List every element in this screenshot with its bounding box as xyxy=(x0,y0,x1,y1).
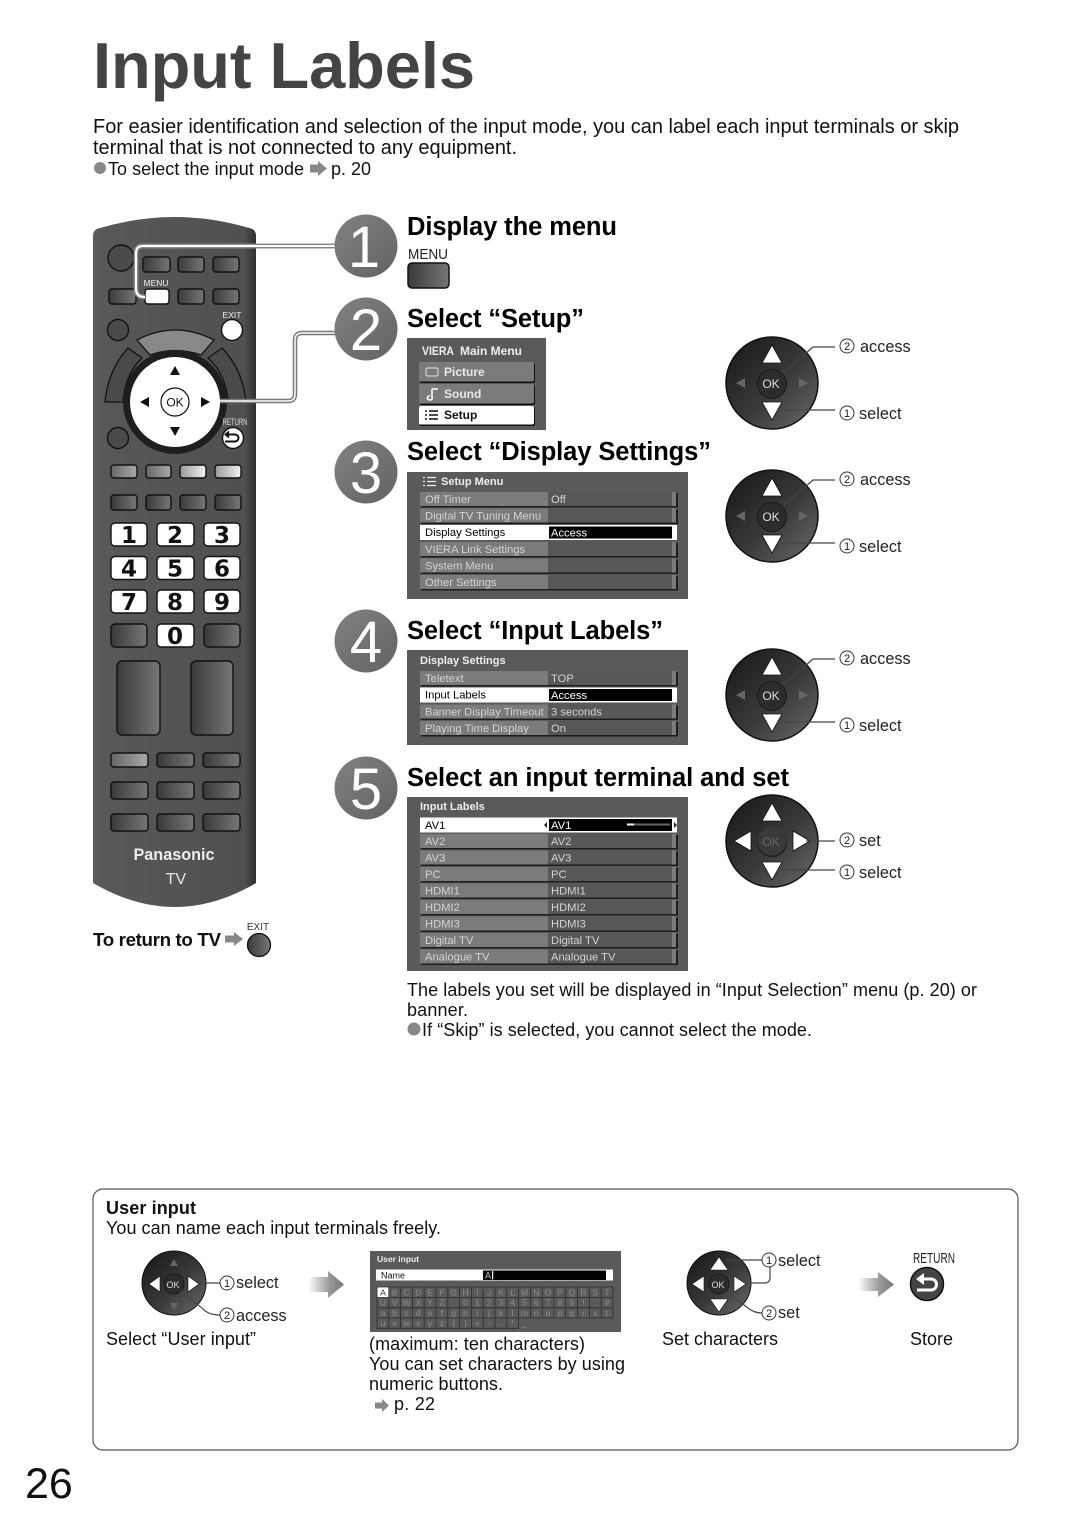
step 3 heading: Select “Display Settings” xyxy=(407,438,711,466)
panel: setup menu: Setup Menu xyxy=(441,476,503,488)
step 2 badge: 2 xyxy=(350,298,382,363)
return button xyxy=(108,417,248,448)
panel: display settings: Input Labels xyxy=(425,690,486,702)
labels: select xyxy=(859,864,902,882)
arrow xyxy=(308,1271,344,1298)
panel: main menu: Picture xyxy=(444,365,485,379)
dpad: step 3 xyxy=(726,470,911,562)
ok ring: OK xyxy=(166,396,184,410)
panel: user input keyboard: abcdefghijklmnopqrst xyxy=(381,1308,609,1318)
panel: setup menu: System Menu xyxy=(425,560,493,572)
panel: display settings xyxy=(407,650,688,745)
panel: user input keyboard: uvwxyz()+-.*_ xyxy=(381,1318,527,1328)
step 5 heading: Select an input terminal and set xyxy=(407,764,790,792)
dpad: set characters xyxy=(687,1251,821,1322)
labels xyxy=(840,338,911,423)
labels: access xyxy=(860,650,911,668)
dpad: step 5: OK xyxy=(762,835,780,849)
panel: input labels: AV2 xyxy=(551,836,571,848)
ok ring xyxy=(123,350,227,454)
intro text: For easier identification and selection of the input mode, you can label each input terminals or skip xyxy=(93,116,959,138)
panel: display settings: 3 seconds xyxy=(551,706,602,718)
dpad: set characters: set xyxy=(778,1304,800,1322)
panel: input labels: PC xyxy=(425,869,441,881)
labels: 1 xyxy=(844,541,850,553)
panel: input labels: HDMI2 xyxy=(425,902,460,914)
return to TV: EXIT xyxy=(247,922,269,933)
number keys: 0 xyxy=(167,624,183,650)
caption: select user input: Select “User input” xyxy=(106,1329,256,1349)
brand: Panasonic xyxy=(134,846,214,864)
panel: input labels: AV3 xyxy=(425,852,445,864)
dpad: set characters: select xyxy=(778,1252,821,1270)
labels: 2 xyxy=(844,653,850,665)
labels xyxy=(840,650,911,735)
panel: input labels: HDMI1 xyxy=(425,886,460,898)
input mode note: To select the input mode xyxy=(108,159,304,179)
panel: display settings: TOP xyxy=(551,673,574,685)
panel: main menu: Setup xyxy=(444,408,477,422)
panel: main menu: Main Menu xyxy=(460,344,522,358)
labels: select xyxy=(859,717,902,735)
caption: maximum characters xyxy=(369,1334,625,1414)
caption: set characters: Set characters xyxy=(662,1329,778,1349)
panel: main menu: VIERA xyxy=(422,346,454,358)
remote control xyxy=(93,217,256,907)
panel: user input keyboard: User input xyxy=(377,1254,419,1264)
labels xyxy=(840,471,911,556)
dpad: select user input: 2 xyxy=(224,1310,230,1322)
panel: setup menu xyxy=(407,472,688,599)
dpad: step 2 xyxy=(726,337,911,429)
return button: RETURN xyxy=(222,417,248,427)
page number: 26 xyxy=(25,1460,73,1508)
panel: input labels: Analogue TV xyxy=(425,952,490,964)
step 4 badge: 4 xyxy=(350,610,382,675)
connector: step 2 to ok ring xyxy=(220,333,340,401)
labels: select xyxy=(859,538,902,556)
step 2 heading: Select “Setup” xyxy=(407,305,584,333)
panel: display settings: Playing Time Display xyxy=(425,723,529,735)
panel: input labels: AV2 xyxy=(425,836,445,848)
number keys: 1 xyxy=(121,523,137,549)
panel: input labels: HDMI3 xyxy=(425,918,460,930)
labels: 1 xyxy=(844,720,850,732)
dpad: select user input xyxy=(142,1251,287,1325)
panel: input labels: AV3 xyxy=(551,852,571,864)
dpad: select user input: OK xyxy=(166,1280,180,1290)
panel: setup menu: Access xyxy=(551,528,587,540)
dpad: set characters: OK xyxy=(711,1280,725,1290)
panel: display settings: Banner Display Timeout xyxy=(425,706,545,718)
panel: user input keyboard xyxy=(370,1251,621,1332)
labels: 2 xyxy=(844,835,850,847)
step 1 badge: 1 xyxy=(348,215,380,280)
caption: maximum characters: You can set characters by using xyxy=(369,1354,625,1374)
number keys: 3 xyxy=(214,523,230,549)
intro text xyxy=(93,116,959,159)
labels: set xyxy=(859,832,881,850)
user input description: You can name each input terminals freely. xyxy=(106,1218,441,1238)
panel: setup menu: Off xyxy=(551,494,567,506)
caption: store: Store xyxy=(910,1329,953,1349)
panel: input labels xyxy=(407,797,688,971)
dpad: set characters: 1 xyxy=(766,1255,772,1267)
panel: display settings: Teletext xyxy=(425,673,464,685)
return to TV: To return to TV xyxy=(93,929,221,950)
labels: access xyxy=(860,338,911,356)
dpad: step 4: OK xyxy=(762,689,780,703)
caption: maximum characters: p. 22 xyxy=(394,1394,435,1414)
power and top buttons: EXIT xyxy=(223,310,241,320)
number keys xyxy=(111,523,240,650)
step 4 badge xyxy=(334,610,398,675)
dpad: step 4 xyxy=(726,649,911,741)
panel: display settings: Access xyxy=(551,690,587,702)
panel: input labels: PC xyxy=(551,869,567,881)
return button: RETURN xyxy=(913,1250,955,1267)
number keys: 5 xyxy=(167,556,183,582)
panel: user input keyboard: A BCDEFGHIJKLMNOPQRST xyxy=(380,1288,610,1298)
note below step 5: The labels you set will be displayed in “Input Selection” menu (p. 20) or xyxy=(407,980,977,1000)
panel: input labels: HDMI2 xyxy=(551,902,586,914)
labels: 1 xyxy=(844,867,850,879)
panel: main menu xyxy=(407,338,546,430)
panel: input labels: AV1 xyxy=(425,820,445,832)
panel: setup menu: Other Settings xyxy=(425,577,497,589)
panel: user input keyboard: A xyxy=(485,1270,491,1280)
caption: maximum characters: (maximum: ten characters) xyxy=(369,1334,585,1354)
dpad: select user input: access xyxy=(236,1307,287,1325)
labels: 1 xyxy=(844,408,850,420)
note below step 5: banner. xyxy=(407,1000,468,1020)
connector: step 1 to menu button xyxy=(136,246,340,297)
number keys: 4 xyxy=(121,556,137,582)
panel: setup menu: Digital TV Tuning Menu xyxy=(425,510,541,522)
labels xyxy=(840,832,902,882)
arrow xyxy=(858,1272,894,1297)
step 3 badge: 3 xyxy=(350,441,382,506)
panel: user input xyxy=(93,1189,1018,1450)
dpad: step 2: OK xyxy=(762,377,780,391)
step 1 badge xyxy=(334,214,398,280)
panel: input labels: Analogue TV xyxy=(551,952,616,964)
lower buttons xyxy=(111,753,240,831)
labels: access xyxy=(860,471,911,489)
dpad: select user input: select xyxy=(236,1274,279,1292)
labels: 2 xyxy=(844,341,850,353)
number keys: 7 xyxy=(121,590,137,616)
brand: TV xyxy=(166,871,187,888)
number keys: 6 xyxy=(214,556,230,582)
labels: 2 xyxy=(844,474,850,486)
volume and channel rockers xyxy=(117,661,233,735)
dpad: step 3: OK xyxy=(762,510,780,524)
power and top buttons xyxy=(108,245,242,340)
panel: input labels: HDMI1 xyxy=(551,886,586,898)
menu button xyxy=(408,246,449,288)
colour buttons xyxy=(111,465,241,510)
panel: user input keyboard: UVWXYZ0123456789!:# xyxy=(380,1298,610,1308)
step 4 heading: Select “Input Labels” xyxy=(407,617,663,645)
panel: user input keyboard: Name xyxy=(381,1270,405,1280)
menu button: MENU xyxy=(408,246,448,263)
number keys: 9 xyxy=(214,590,230,616)
number keys: 2 xyxy=(167,523,183,549)
brand xyxy=(134,846,214,888)
note below step 5: If “Skip” is selected, you cannot select the mode. xyxy=(422,1020,812,1040)
panel: input labels: Input Labels xyxy=(420,801,485,813)
panel: main menu: Sound xyxy=(444,387,481,401)
step 5 badge xyxy=(334,756,398,822)
step 5 badge: 5 xyxy=(350,757,382,822)
labels: select xyxy=(859,405,902,423)
panel: setup menu: VIERA Link Settings xyxy=(425,544,526,556)
dpad: select user input: 1 xyxy=(224,1278,230,1290)
note below step 5 xyxy=(407,980,977,1040)
step 2 badge xyxy=(334,298,398,363)
panel: input labels: Digital TV xyxy=(551,935,600,947)
input mode note: p. 20 xyxy=(331,159,371,179)
panel: input labels: Digital TV xyxy=(425,935,474,947)
title: Input Labels xyxy=(93,29,475,102)
panel: display settings: On xyxy=(551,723,566,735)
panel: input labels: HDMI3 xyxy=(551,918,586,930)
caption: maximum characters: numeric buttons. xyxy=(369,1374,503,1394)
intro text: terminal that is not connected to any equipment. xyxy=(93,137,517,159)
step 1 heading: Display the menu xyxy=(407,213,617,241)
dpad: set characters: 2 xyxy=(766,1308,772,1320)
navigation arcs xyxy=(105,330,246,402)
number keys: 8 xyxy=(167,590,183,616)
user input heading: User input xyxy=(106,1198,196,1218)
panel: setup menu: Display Settings xyxy=(425,527,506,539)
return button xyxy=(910,1250,955,1300)
step 3 badge xyxy=(334,440,398,506)
panel: display settings: Display Settings xyxy=(420,655,506,667)
power and top buttons: MENU xyxy=(143,278,169,288)
return to TV xyxy=(93,922,270,956)
panel: setup menu: Off Timer xyxy=(425,494,471,506)
panel: input labels: AV1 xyxy=(551,820,571,832)
dpad: step 5 xyxy=(726,795,902,887)
